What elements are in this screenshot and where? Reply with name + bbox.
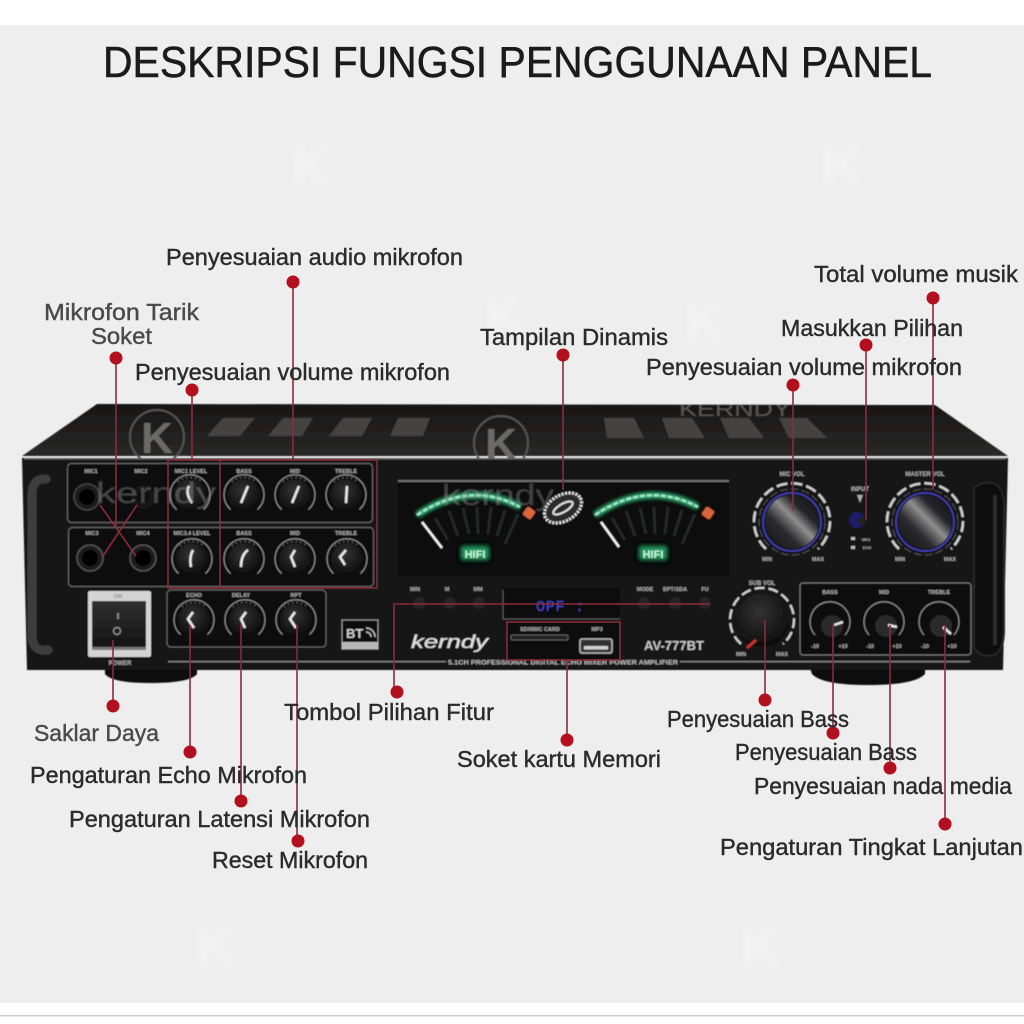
power switch: ON — [114, 594, 122, 600]
kerndy logos on top cover: K — [141, 414, 173, 463]
function buttons left — [410, 587, 485, 609]
amplifier — [22, 399, 1008, 685]
function buttons right: BPT/SDA — [663, 587, 687, 593]
panel: mic row 2: MID — [290, 531, 300, 537]
label: tingkat lanjutan: Pengaturan Tingkat Lanjutan — [720, 834, 1023, 860]
panel: mic row 2: MIC3,4 LEVEL — [174, 531, 211, 537]
center emblem — [539, 487, 587, 529]
panel: mic row 1: MIC1 — [84, 469, 98, 475]
sub volume knob: MIN — [736, 652, 746, 658]
panel: mic row 2: MIC4 — [136, 531, 151, 537]
kerndy logos on top cover — [130, 410, 528, 470]
function buttons left: MIN — [410, 587, 420, 593]
amplifier top cover — [22, 399, 1008, 470]
function buttons right — [637, 587, 711, 609]
input selector: MP3 — [862, 537, 871, 542]
model name: AV-777BT — [644, 639, 704, 653]
input selector — [849, 487, 871, 550]
function buttons left: MM — [473, 587, 483, 593]
power switch — [88, 591, 151, 667]
memory card and USB slots: MP3 — [591, 627, 603, 633]
power switch: POWER — [109, 661, 132, 667]
top vents — [207, 418, 827, 438]
panel: echo delay reverb — [167, 590, 326, 647]
panel: tone controls: -10 — [811, 644, 819, 650]
panel: mic row 1 — [68, 464, 372, 522]
panel: tone controls: BASS — [822, 590, 838, 596]
left handle — [32, 479, 48, 650]
digital readout: OPF : — [536, 599, 584, 616]
background watermarks: K — [685, 289, 725, 352]
function buttons left: M — [445, 587, 450, 593]
sub volume knob: SUB VOL — [749, 581, 776, 587]
mic volume knob: MIC VOL — [780, 472, 805, 478]
background watermarks — [195, 134, 862, 977]
label: tampilan dinamis: Tampilan Dinamis — [480, 324, 668, 350]
panel: tone controls — [800, 583, 971, 655]
mic volume knob — [754, 472, 830, 563]
panel: mic row 1: MIC2 — [134, 469, 148, 475]
brand logo: kerndy — [411, 632, 489, 652]
panel: mic row 2: TREBLE — [335, 531, 357, 537]
master volume knob: MAX — [944, 557, 956, 563]
watermark on panel: kerndy — [96, 477, 216, 510]
left meter: HIFI — [465, 549, 485, 561]
sub volume knob: MAX — [776, 652, 788, 658]
left meter — [417, 495, 536, 561]
label: penyesuaian bass 1: Penyesuaian Bass — [667, 706, 849, 732]
panel: mic row 2: BASS — [236, 531, 252, 537]
panel: mic row 1: MID — [290, 469, 300, 475]
label: saklar daya: Saklar Daya — [34, 720, 159, 746]
panel: echo delay reverb: ECHO — [186, 593, 203, 599]
master volume knob — [887, 472, 963, 563]
input selector: DVD — [863, 545, 871, 550]
label: latensi mikrofon: Pengaturan Latensi Mikrofon — [69, 806, 370, 832]
label: masukkan pilihan: Masukkan Pilihan — [781, 315, 963, 341]
callout leader lines — [100, 282, 945, 841]
panel: tone controls: MID — [879, 590, 889, 596]
memory card and USB slots — [507, 622, 620, 660]
background watermarks: K — [195, 914, 235, 977]
panel: mic row 1: MIC1 LEVEL — [175, 469, 208, 475]
label: reset mikrofon: Reset Mikrofon — [212, 847, 368, 873]
panel: tone controls: -10 — [921, 644, 929, 650]
digital readout — [503, 588, 620, 620]
panel: tone controls: TREBLE — [928, 590, 950, 596]
panel: echo delay reverb: RPT — [290, 593, 302, 599]
label: volume mikrofon right: Penyesuaian volume mikrofon — [646, 354, 962, 380]
label: mikrofon tarik soket: Mikrofon Tarik — [44, 299, 200, 325]
mic volume knob: MAX — [812, 557, 824, 563]
amplifier feet — [105, 668, 925, 685]
panel: tone controls: +10 — [947, 644, 957, 650]
watermark on panel — [96, 477, 554, 512]
panel: mic row 1: TREBLE — [335, 469, 357, 475]
panel: echo delay reverb: DELAY — [232, 593, 250, 599]
label: penyesuaian bass 2: Penyesuaian Bass — [735, 739, 917, 765]
callout dots — [106, 276, 952, 848]
label: volume mikrofon left: Penyesuaian volume mikrofon — [135, 359, 450, 385]
mic volume knob: MIN — [762, 557, 772, 563]
panel: tone controls: +10 — [892, 644, 902, 650]
panel: tone controls: -10 — [866, 644, 874, 650]
panel: tone controls: +10 — [838, 644, 848, 650]
input selector: INPUT — [851, 487, 869, 493]
label: echo mikrofon: Pengaturan Echo Mikrofon — [30, 762, 307, 788]
panel: mic row 2 — [68, 528, 374, 586]
bluetooth badge: BT — [346, 626, 363, 641]
amplifier top cover: KERNDY — [679, 399, 791, 421]
background watermarks: K — [742, 914, 782, 977]
sub volume knob — [730, 581, 794, 658]
background watermarks: K — [292, 134, 332, 197]
label: soket kartu memori: Soket kartu Memori — [457, 746, 661, 772]
memory card and USB slots: SD/MMC CARD — [520, 627, 560, 633]
amplifier front panel — [22, 458, 1008, 670]
label: nada media: Penyesuaian nada media — [754, 773, 1012, 799]
master volume knob: MASTER VOL — [905, 472, 945, 478]
function buttons right: MODE — [637, 587, 654, 593]
right meter — [595, 495, 715, 561]
label: audio mikrofon: Penyesuaian audio mikrofon — [166, 244, 463, 270]
title: DESKRIPSI FUNGSI PENGGUNAAN PANEL — [103, 38, 932, 87]
product strip: 5.1CH PROFESSIONAL DIGITAL ECHO MIXER POWER AMPLIFIER — [448, 660, 678, 666]
kerndy logos on top cover: K — [485, 420, 517, 469]
label: tombol pilihan fitur: Tombol Pilihan Fitur — [284, 699, 494, 725]
right handle — [974, 482, 1004, 656]
label: total volume musik: Total volume musik — [814, 261, 1019, 287]
right meter: HIFI — [643, 549, 663, 561]
dynamic display VU meters — [398, 480, 729, 576]
label: mikrofon tarik soket: Soket — [91, 323, 153, 349]
master volume knob: MIN — [895, 557, 905, 563]
watermark on panel: kerndy — [442, 479, 554, 512]
background watermarks: K — [485, 284, 525, 347]
function buttons right: FU — [701, 587, 709, 593]
label: mikrofon tarik soket — [44, 299, 200, 349]
bluetooth badge — [342, 620, 378, 649]
panel: mic row 1: BASS — [236, 469, 252, 475]
panel: mic row 2: MIC3 — [85, 531, 99, 537]
background watermarks: K — [822, 134, 862, 197]
